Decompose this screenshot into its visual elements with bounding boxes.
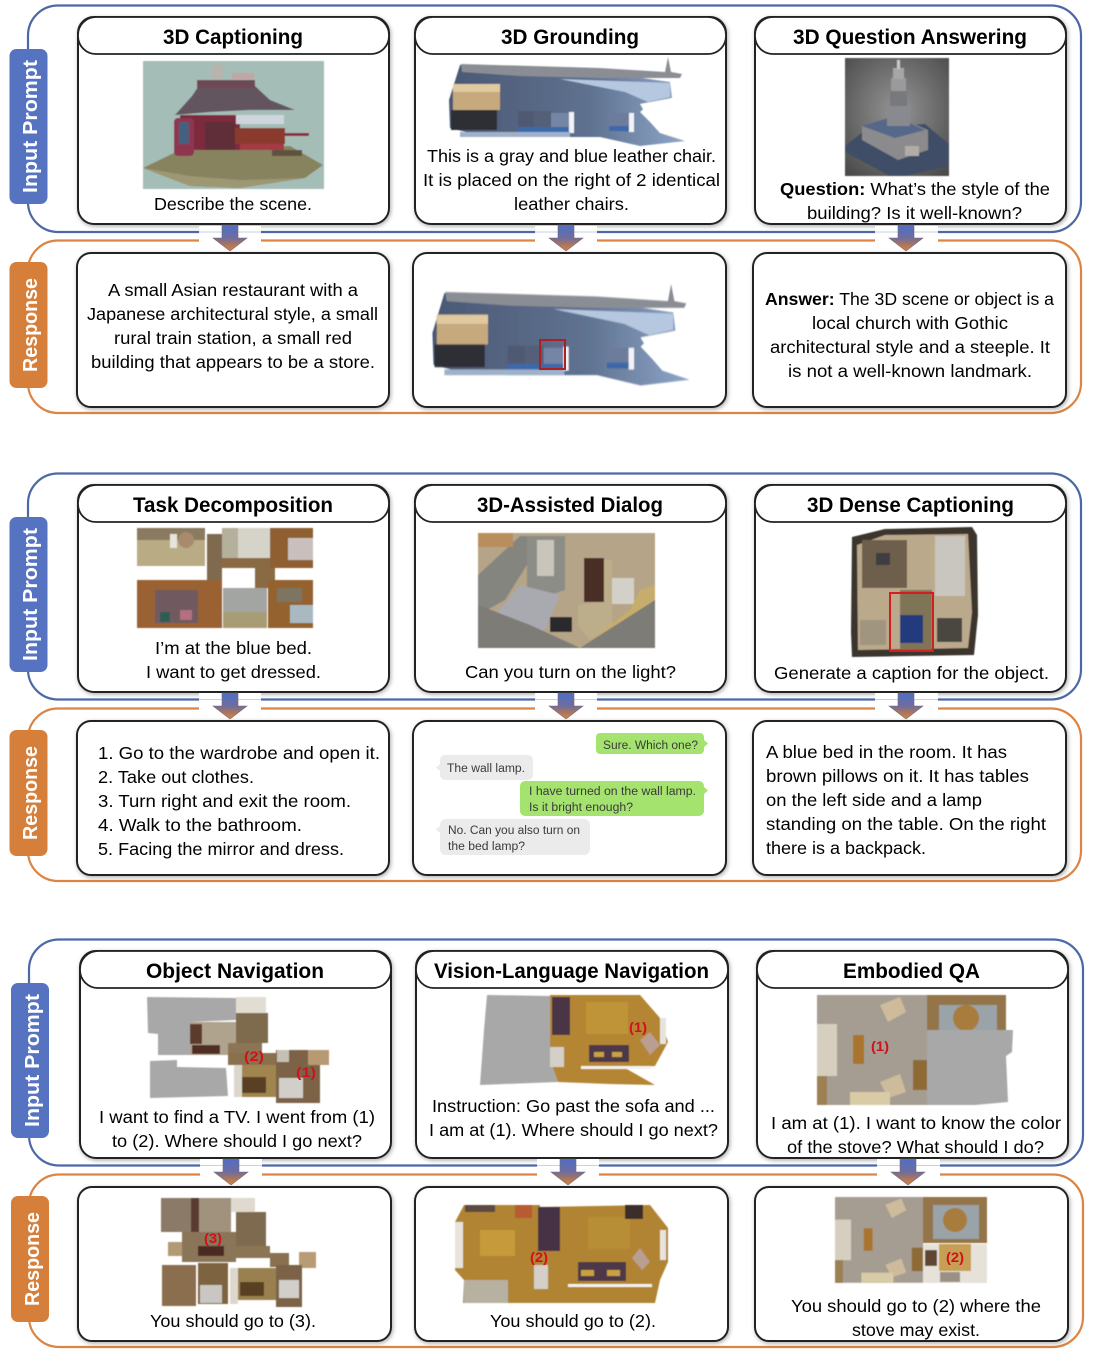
location marker: (1) xyxy=(296,1064,316,1080)
panel: captioning response: A small Asian restaurant with a xyxy=(108,280,358,300)
side tab: response xyxy=(11,1196,49,1322)
panel: dense caption response xyxy=(753,721,1066,875)
prompt text xyxy=(429,1096,718,1140)
prompt text: Can you turn on the light? xyxy=(465,662,676,682)
response text: You should go to (2). xyxy=(490,1311,656,1331)
panel: vision-language navigation xyxy=(416,951,728,1158)
panel: captioning response xyxy=(77,253,389,407)
panel: dense caption response: brown pillows on it. It has tables xyxy=(766,766,1029,786)
panel: 3D dense captioning xyxy=(755,485,1066,692)
panel: task steps response: 2. Take out clothes. xyxy=(98,767,254,787)
panel: grounding response xyxy=(413,253,726,407)
panel: dense caption response: there is a backpack. xyxy=(766,838,926,858)
panel: dense caption response: on the left side and a lamp xyxy=(766,790,982,810)
panel: question answering response: local church with Gothic xyxy=(812,313,1008,333)
side tab: input prompt: Input Prompt xyxy=(20,60,42,193)
panel: dialog response xyxy=(413,721,726,875)
panel: 3D-assisted dialog xyxy=(415,485,726,692)
chat bubble: The wall lamp. xyxy=(447,763,525,775)
prompt text: leather chairs. xyxy=(514,194,629,214)
prompt text: I want to find a TV. I went from (1) xyxy=(99,1107,375,1127)
panel: task decomposition xyxy=(78,485,389,692)
response text: stove may exist. xyxy=(852,1320,980,1340)
red selection box xyxy=(540,340,565,369)
location marker: (2) xyxy=(946,1249,964,1265)
panel: 3D captioning xyxy=(78,17,389,224)
prompt text: Instruction: Go past the sofa and ... xyxy=(432,1096,715,1116)
prompt text: of the stove? What should I do? xyxy=(787,1137,1044,1157)
panel: task steps response: 4. Walk to the bathroom. xyxy=(98,815,302,835)
side tab: input prompt: Input Prompt xyxy=(22,994,44,1127)
image: room cutaway xyxy=(478,533,655,648)
prompt text xyxy=(99,1107,375,1151)
panel: 3D question answering xyxy=(755,17,1066,224)
prompt text xyxy=(423,146,720,214)
prompt text: Generate a caption for the object. xyxy=(774,663,1049,683)
image: church model xyxy=(845,58,949,176)
section 3: response frame xyxy=(29,1174,1083,1347)
image: full floor plan xyxy=(161,1198,316,1307)
panel: task steps response: 5. Facing the mirror and dress. xyxy=(98,839,344,859)
chat bubble xyxy=(436,755,533,780)
response text: You should go to (2) where the xyxy=(791,1296,1041,1316)
side tab: input prompt xyxy=(11,983,49,1138)
image: living room partial plan xyxy=(480,995,668,1085)
prompt text xyxy=(146,638,321,682)
panel: captioning response: rural train station, a small red xyxy=(114,328,352,348)
side tab: response: Response xyxy=(20,278,42,372)
chat bubble: I have turned on the wall lamp. xyxy=(529,786,696,798)
location marker: (1) xyxy=(629,1019,647,1035)
panel: 3D grounding xyxy=(415,17,726,224)
location marker: (2) xyxy=(244,1048,264,1064)
location marker: (1) xyxy=(871,1038,889,1054)
panel: task steps response xyxy=(77,721,389,875)
image: restaurant model xyxy=(143,61,324,189)
side tab: response: Response xyxy=(20,746,42,840)
section 3: input prompt frame xyxy=(29,940,1083,1166)
section 2: response frame xyxy=(28,708,1081,881)
side tab: input prompt xyxy=(10,517,48,672)
side tab: input prompt xyxy=(10,49,48,204)
panel: object navigation response xyxy=(78,1187,391,1341)
side tab: response xyxy=(10,730,48,856)
prompt text: I am at (1). I want to know the color xyxy=(771,1113,1061,1133)
location marker: (3) xyxy=(204,1230,222,1246)
panel: task steps response: 1. Go to the wardrobe and open it. xyxy=(98,743,380,763)
image: apartment floor plan xyxy=(137,528,313,628)
image: full living room plan xyxy=(455,1205,668,1303)
prompt text: I am at (1). Where should I go next? xyxy=(429,1120,718,1140)
red selection box xyxy=(890,593,933,651)
chat bubble: No. Can you also turn on xyxy=(448,825,580,837)
heading: 3D dense captioning: 3D Dense Captioning xyxy=(807,494,1014,517)
question text xyxy=(780,179,1050,223)
heading: task decomposition: Task Decomposition xyxy=(133,494,333,517)
heading: vision-language navigation: Vision-Language Navigation xyxy=(434,960,709,983)
image: partial house plan xyxy=(817,995,1013,1105)
side tab: response xyxy=(10,262,48,388)
prompt text: It is placed on the right of 2 identical xyxy=(423,170,720,190)
panel: vision-language response xyxy=(415,1187,728,1341)
prompt text: This is a gray and blue leather chair. xyxy=(427,146,716,166)
question text: building? Is it well-known? xyxy=(807,203,1022,223)
section 2: input prompt frame xyxy=(28,474,1081,700)
panel: object navigation xyxy=(80,951,391,1158)
heading: object navigation: Object Navigation xyxy=(146,960,324,983)
heading: 3D-assisted dialog: 3D-Assisted Dialog xyxy=(477,494,663,517)
side tab: input prompt: Input Prompt xyxy=(20,528,42,661)
heading: 3D question answering: 3D Question Answering xyxy=(793,26,1027,49)
chat bubble: the bed lamp? xyxy=(448,841,525,853)
chat bubble xyxy=(436,819,590,855)
arrows: section 2 xyxy=(199,693,938,719)
panel: captioning response: Japanese architectural style, a small xyxy=(87,304,378,324)
section 1: input prompt frame xyxy=(28,6,1081,232)
heading: 3D captioning: 3D Captioning xyxy=(163,26,303,49)
panel: question answering response xyxy=(753,253,1066,407)
image: full house plan xyxy=(835,1197,987,1283)
chat bubble: Sure. Which one? xyxy=(603,740,698,752)
point cloud image xyxy=(432,284,690,385)
panel: embodied QA xyxy=(757,951,1068,1158)
panel: dense caption response: standing on the table. On the right xyxy=(766,814,1046,834)
chat bubble xyxy=(520,781,708,816)
prompt text xyxy=(771,1113,1061,1157)
side tab: response: Response xyxy=(22,1212,44,1306)
panel: embodied QA response xyxy=(755,1187,1068,1341)
prompt text: to (2). Where should I go next? xyxy=(112,1131,362,1151)
heading: embodied QA: Embodied QA xyxy=(843,960,980,983)
arrows: section 1 xyxy=(199,225,938,251)
panel: question answering response: architectural style and a steeple. It xyxy=(770,337,1050,357)
panel: question answering response: Answer: The 3D scene or object is a xyxy=(765,289,1054,309)
prompt text: Describe the scene. xyxy=(154,194,312,214)
panel: dense caption response: A blue bed in the room. It has xyxy=(766,742,1007,762)
response text xyxy=(791,1296,1041,1340)
image: partial floor plan xyxy=(147,997,329,1103)
point cloud image xyxy=(449,57,685,146)
prompt text: I’m at the blue bed. xyxy=(155,638,312,658)
chat bubble: Is it bright enough? xyxy=(529,802,633,814)
panel: question answering response: is not a well-known landmark. xyxy=(788,361,1032,381)
prompt text: I want to get dressed. xyxy=(146,662,321,682)
heading: 3D grounding: 3D Grounding xyxy=(501,26,639,49)
question text: Question: What’s the style of the xyxy=(780,179,1050,199)
response text: You should go to (3). xyxy=(150,1311,316,1331)
section 1: response frame xyxy=(28,240,1081,413)
location marker: (2) xyxy=(530,1249,548,1265)
panel: captioning response: building that appears to be a store. xyxy=(91,352,375,372)
panel: task steps response: 3. Turn right and exit the room. xyxy=(98,791,351,811)
chat bubble xyxy=(596,733,708,754)
image: bedroom top-down view xyxy=(851,527,978,657)
arrows: section 3 xyxy=(200,1159,940,1185)
